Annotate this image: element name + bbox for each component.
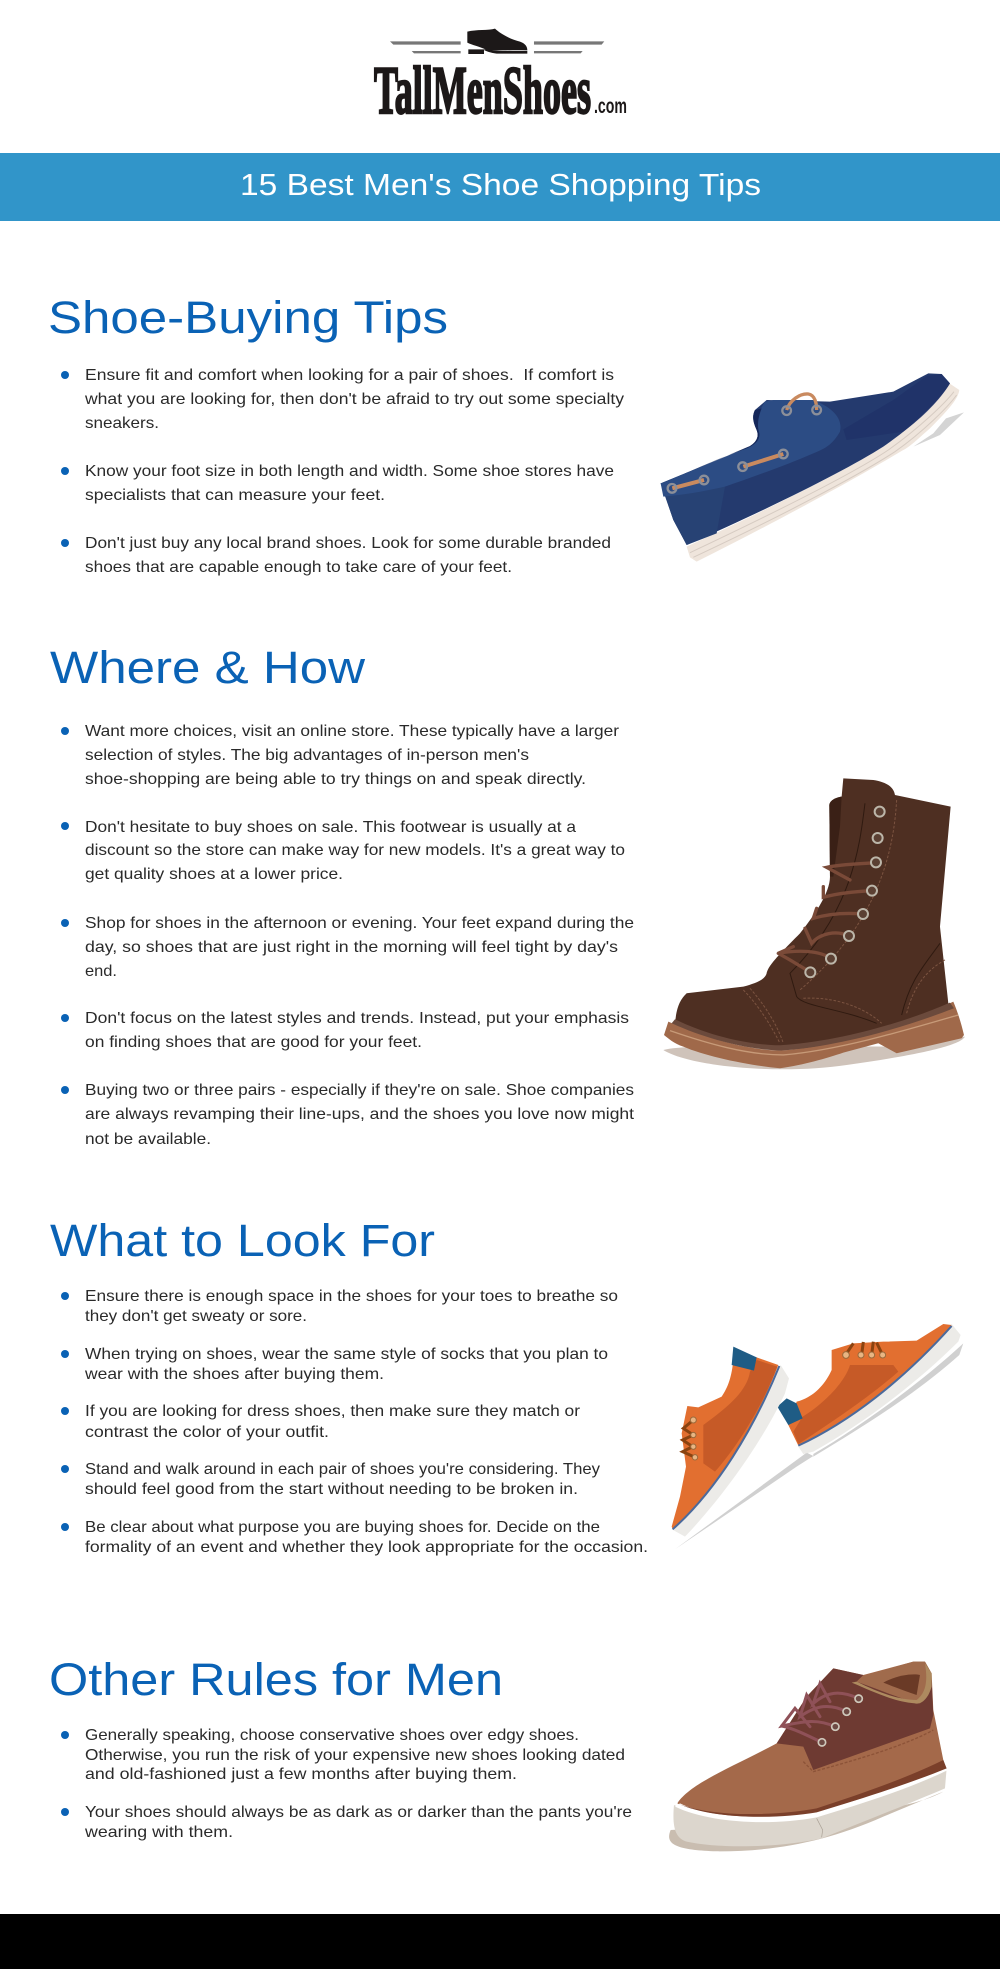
heading: where and how: Where & How (50, 642, 366, 693)
tips list: shoe-buying: Know your foot size in both length and width. Some shoe stores have (85, 463, 614, 480)
tips list: what to look for: formality of an event and whether they look appropriate for the occasion. (85, 1539, 648, 1556)
icon: brown chukka shoe (669, 1662, 947, 1851)
tips list: other rules: wearing with them. (84, 1824, 233, 1841)
tips list: where and how: Shop for shoes in the afternoon or evening. Your feet expand during the (85, 915, 634, 932)
tips list: where and how: Buying two or three pairs - especially if they're on sale. Shoe companies (85, 1082, 634, 1099)
tips list: where and how: discount so the store can make way for new models. It's a great way to (85, 842, 625, 859)
tips list: what to look for: Be clear about what purpose you are buying shoes for. Decide on the (85, 1519, 600, 1536)
right sneaker (777, 1324, 961, 1454)
tips list: shoe-buying: shoes that are capable enough to take care of your feet. (85, 559, 512, 576)
title banner: 15 Best Men's Shoe Shopping Tips (240, 167, 761, 202)
heading: other rules for men: Other Rules for Men (49, 1654, 503, 1705)
tips list: what to look for: Ensure there is enough space in the shoes for your toes to breathe so (85, 1288, 618, 1305)
tips list: where and how: Don't focus on the latest styles and trends. Instead, put your emphasis (85, 1010, 629, 1027)
tips list: where and how: are always revamping their line-ups, and the shoes you love now might (85, 1106, 635, 1123)
icon: orange sneakers (672, 1324, 963, 1549)
footer bar (0, 1914, 1000, 1969)
tips list: where and how (61, 723, 635, 1148)
tips list: where and how: Don't hesitate to buy shoes on sale. This footwear is usually at a (85, 819, 576, 836)
tips list: where and how: not be available. (85, 1131, 211, 1148)
panel: where and how (50, 642, 965, 1148)
tips list: what to look for: contrast the color of your outfit. (85, 1424, 329, 1441)
tips list: shoe-buying: what you are looking for, then don't be afraid to try out some specialty (84, 391, 624, 408)
tips list: shoe-buying: Ensure fit and comfort when looking for a pair of shoes. If comfort is (85, 367, 614, 384)
logo: TallMenShoes (374, 52, 591, 128)
tips list: shoe-buying (61, 367, 624, 576)
tips list: what to look for (61, 1288, 648, 1556)
heading: what to look for: What to Look For (50, 1215, 435, 1266)
tips list: what to look for: Stand and walk around in each pair of shoes you're considering. They (85, 1461, 600, 1478)
tips list: where and how: get quality shoes at a lower price. (85, 866, 343, 883)
tips list: other rules (61, 1727, 632, 1841)
tips list: other rules: and old-fashioned just a few months after buying them. (85, 1766, 517, 1783)
icon: blue boat shoe (661, 373, 964, 562)
tips list: where and how: end. (85, 963, 117, 980)
heading: shoe-buying tips: Shoe-Buying Tips (48, 292, 448, 343)
tips list: other rules: Your shoes should always be as dark as or darker than the pants you're (85, 1804, 632, 1821)
tips list: what to look for: should feel good from the start without needing to be broken in. (85, 1481, 578, 1498)
tips list: other rules: Generally speaking, choose conservative shoes over edgy shoes. (85, 1727, 579, 1744)
tips list: what to look for: When trying on shoes, wear the same style of socks that you plan to (85, 1346, 608, 1363)
tips list: what to look for: they don't get sweaty or sore. (85, 1308, 307, 1325)
tips list: what to look for: wear with the shoes after buying them. (84, 1366, 384, 1383)
tips list: where and how: selection of styles. The big advantages of in-person men's (85, 747, 529, 764)
logo (374, 29, 627, 128)
title banner (0, 153, 1000, 221)
tips list: other rules: Otherwise, you run the risk of your expensive new shoes looking dated (85, 1747, 625, 1764)
tips list: shoe-buying: specialists that can measure your feet. (85, 487, 385, 504)
tips list: shoe-buying: Don't just buy any local brand shoes. Look for some durable branded (85, 535, 611, 552)
panel: what to look for (50, 1215, 963, 1556)
left sneaker (672, 1347, 789, 1537)
panel: shoe-buying tips (48, 292, 964, 576)
tips list: what to look for: If you are looking for dress shoes, then make sure they match or (85, 1403, 581, 1420)
panel: other rules for men (49, 1654, 947, 1851)
tips list: where and how: on finding shoes that are good for your feet. (85, 1034, 422, 1051)
tips list: where and how: shoe-shopping are being able to try things on and speak directly. (85, 771, 586, 788)
logo: .com (594, 95, 627, 118)
tips list: shoe-buying: sneakers. (85, 415, 159, 432)
icon: brown boot (663, 778, 965, 1069)
tips list: where and how: day, so shoes that are just right in the morning will feel tight by day's (85, 939, 618, 956)
tips list: where and how: Want more choices, visit an online store. These typically have a larger (85, 723, 620, 740)
